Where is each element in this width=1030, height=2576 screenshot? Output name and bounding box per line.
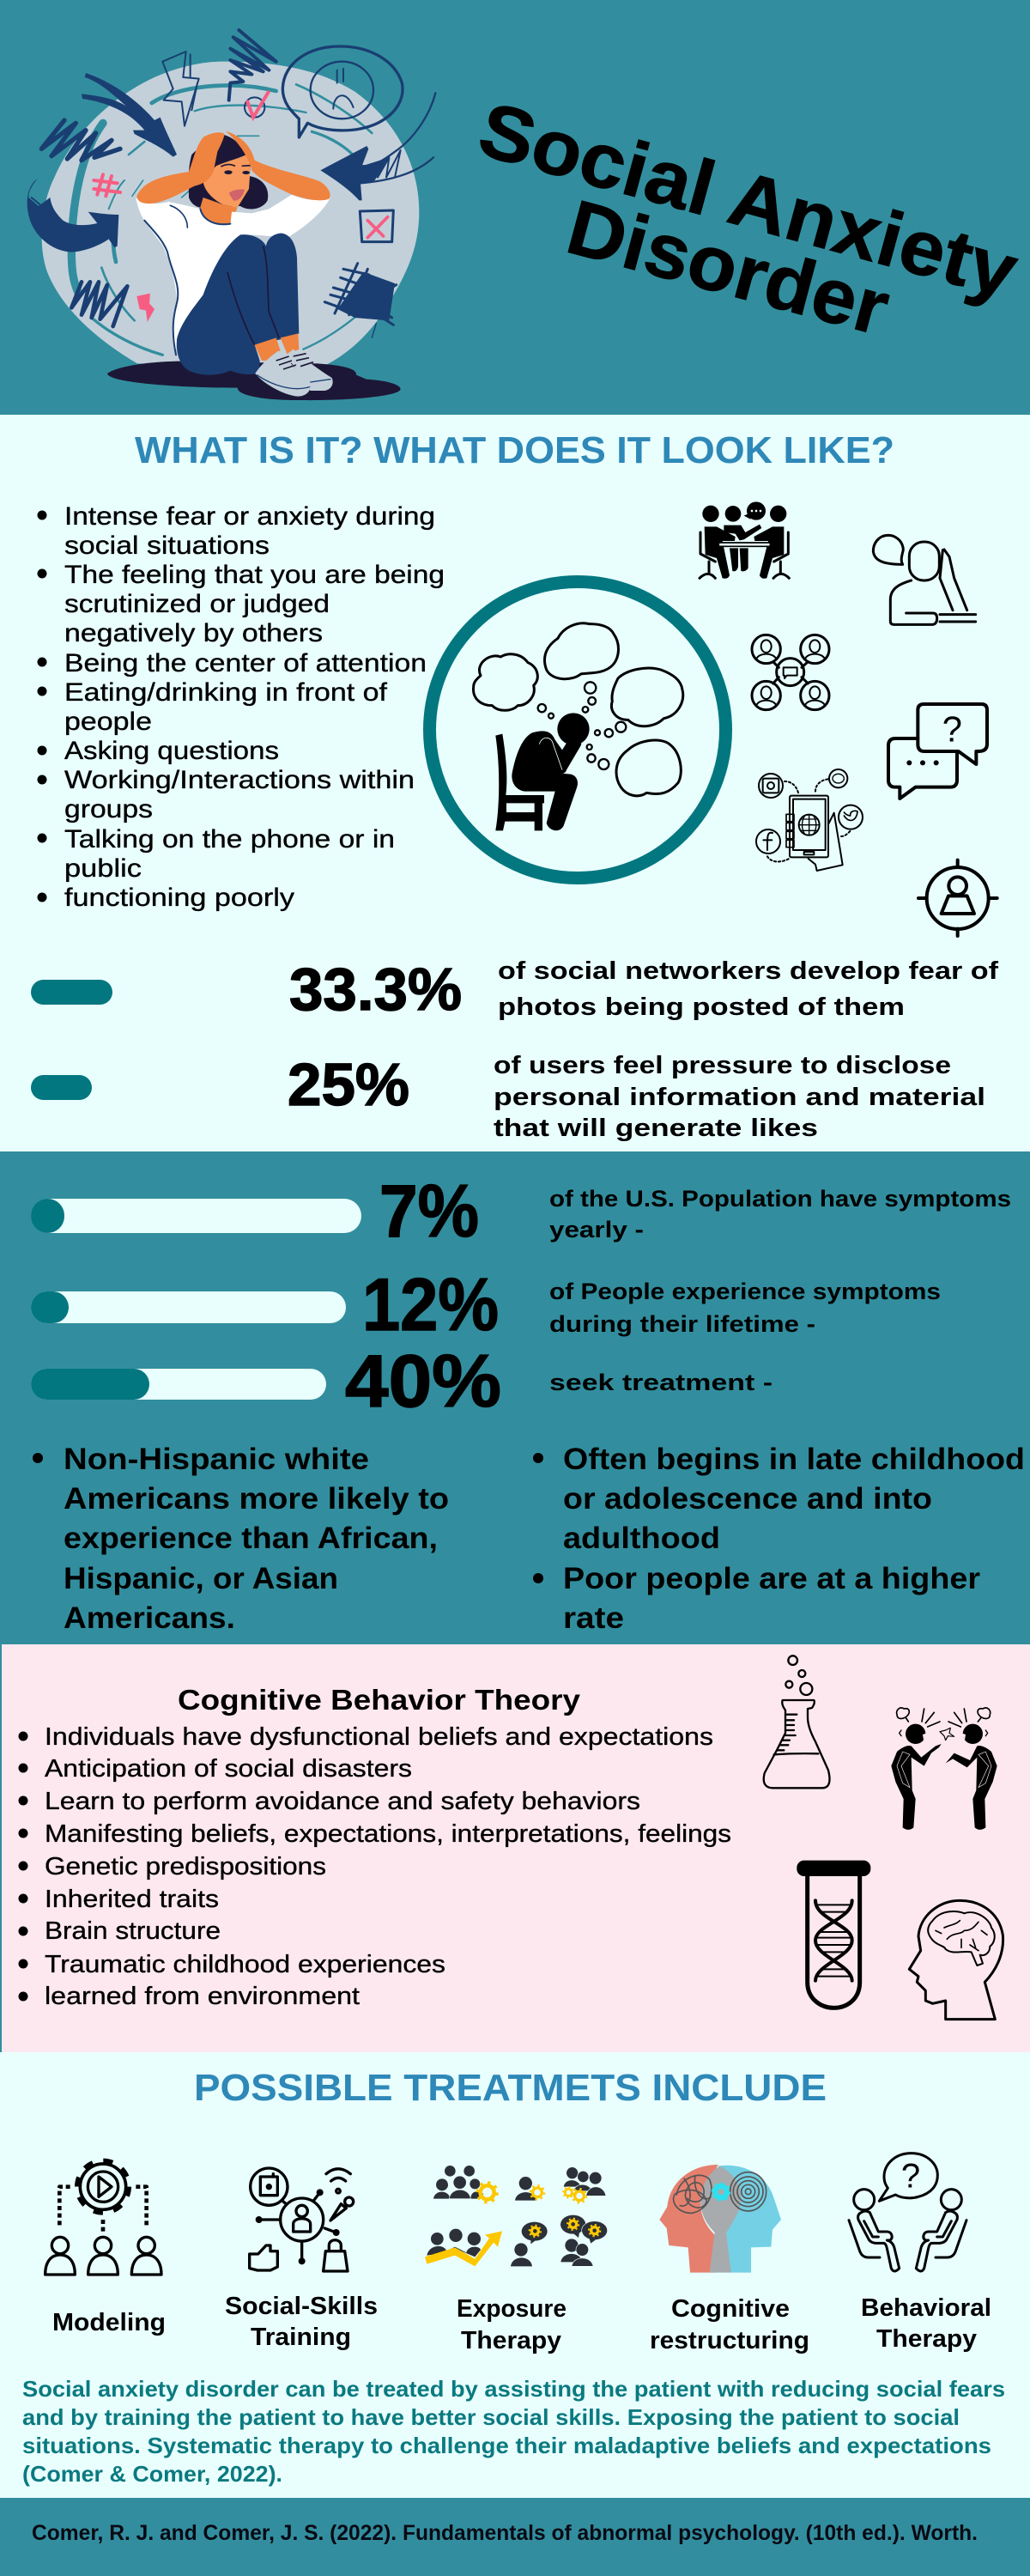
treatment labels: restructuring [650, 2327, 809, 2354]
icon: behavioral therapy [849, 2154, 966, 2271]
stat: 7%: of the U.S. Population have symptoms [549, 1186, 1011, 1212]
demographics bullet: left: Hispanic, or Asian [64, 1562, 338, 1595]
demographics bullets: right: or adolescence and into [563, 1482, 932, 1516]
symptom bullet list: Being the center of attention [64, 649, 427, 677]
illustration: anxious woman [27, 30, 435, 400]
treatment labels: Exposure [457, 2295, 566, 2323]
theory bullet list: Learn to perform avoidance and safety behaviors [45, 1788, 640, 1815]
theory bullet list: Manifesting beliefs, expectations, interpretations, feelings [45, 1820, 731, 1848]
treatment description paragraph: Social anxiety disorder can be treated by assisting the patient with reducing social fears [22, 2376, 1005, 2402]
icon: chat bubbles with question mark: ? [942, 708, 962, 749]
title: Disorder [559, 185, 898, 352]
stat: 33.3% [31, 956, 998, 1023]
demographics bullets: right [533, 1443, 1025, 1635]
treatment labels: Modeling [52, 2309, 166, 2336]
symptom bullet list: public [64, 854, 142, 883]
symptom bullet list: negatively by others [64, 619, 323, 647]
hair [189, 135, 268, 209]
stat: 25%: of users feel pressure to disclose [494, 1052, 951, 1079]
navy arrows [27, 73, 389, 252]
stat: 7%: yearly - [549, 1217, 644, 1242]
icon: exposure therapy [425, 2166, 608, 2266]
treatment labels: Social-Skills [225, 2293, 378, 2320]
icon: social skills training [250, 2168, 354, 2271]
treatment labels [52, 2293, 991, 2354]
stat: 25% [31, 1051, 985, 1142]
demographics bullets: right: Often begins in late childhood [563, 1443, 1025, 1476]
symptom bullet list: functioning poorly [64, 884, 294, 912]
demographics bullets: right: Poor people are at a higher [563, 1562, 980, 1595]
theory bullet list: Anticipation of social disasters [45, 1755, 412, 1783]
legs [177, 234, 299, 375]
title: Social Anxiety [470, 87, 1026, 315]
demographics bullets: right: rate [563, 1601, 624, 1635]
icon: people at table [700, 501, 789, 579]
heading: treatments: POSSIBLE TREATMETS INCLUDE [194, 2067, 827, 2109]
symptom bullet list: people [64, 708, 152, 736]
heading: cognitive behavior theory: Cognitive Behavior Theory [178, 1684, 581, 1716]
treatment labels: Behavioral [861, 2294, 991, 2322]
theory bullet list: Traumatic childhood experiences [45, 1951, 445, 1978]
icon: chat bubbles with question mark [888, 704, 987, 799]
icon: arguing figures [891, 1708, 997, 1830]
symptom bullet list: groups [64, 795, 153, 823]
scribbles [229, 30, 276, 100]
neck and face [200, 197, 238, 225]
shoes [286, 349, 333, 391]
stat: 12%: 12% [362, 1264, 499, 1346]
reference citation: Comer, R. J. and Comer, J. S. (2022). Fundamentals of abnormal psychology. (10th ed.). Worth. [32, 2521, 978, 2545]
stat: 12%: during their lifetime - [549, 1311, 815, 1337]
icon: cognitive restructuring heads [659, 2165, 781, 2273]
stat: 7% [31, 1170, 1011, 1253]
shirt [136, 195, 330, 355]
symptom bullet list: Intense fear or anxiety during [64, 502, 435, 531]
stat: 7%: 7% [379, 1170, 479, 1253]
theory bullet list: Genetic predispositions [45, 1853, 326, 1880]
treatment labels: Therapy [876, 2325, 977, 2353]
theory bullet list [19, 1723, 731, 2010]
shadow [107, 361, 401, 400]
icon: modeling [45, 2160, 161, 2275]
stat: 33.3%: of social networkers develop fear of [498, 957, 998, 985]
stat: 12%: of People experience symptoms [549, 1279, 941, 1304]
stat: 25%: that will generate likes [494, 1115, 818, 1142]
treatment description paragraph: (Comer & Comer, 2022). [22, 2461, 282, 2487]
icon: DNA test tube [797, 1861, 870, 2008]
symptom bullet list: social situations [64, 532, 270, 560]
stat: 25%: 25% [288, 1051, 409, 1118]
symptom bullet list: Eating/drinking in front of [64, 678, 388, 707]
symptom bullet list: Working/Interactions within [64, 766, 415, 794]
treatment labels: Training [251, 2324, 351, 2351]
icon: person with speech bubble [873, 535, 976, 624]
theory bullet list: Individuals have dysfunctional beliefs and expectations [45, 1723, 713, 1751]
treatment description paragraph [22, 2376, 1005, 2487]
theory bullet list: Brain structure [45, 1917, 221, 1945]
demographics bullet: left: Non-Hispanic white [64, 1443, 369, 1476]
icon: flask [764, 1656, 829, 1788]
symptom bullet list: The feeling that you are being [64, 561, 445, 589]
demographics bullet: left: experience than African, [64, 1522, 438, 1555]
symptom bullet list: Asking questions [64, 737, 279, 765]
stat: 40%: 40% [345, 1340, 501, 1423]
treatment labels: Cognitive [671, 2295, 790, 2323]
icon: target person [918, 860, 997, 936]
treatment description paragraph: situations. Systematic therapy to challenge their maladaptive beliefs and expectations [22, 2433, 991, 2458]
icon: head with brain [909, 1900, 1003, 2020]
symptom bullet list: Talking on the phone or in [64, 825, 395, 854]
stat: 25%: personal information and material [494, 1084, 985, 1111]
icon: behavioral therapy: ? [901, 2158, 920, 2196]
stat: 33.3%: 33.3% [289, 956, 462, 1023]
demographics bullets: right: adulthood [563, 1522, 720, 1555]
stat: 33.3%: photos being posted of them [498, 993, 905, 1021]
demographics bullet: left [33, 1443, 449, 1635]
icon: phone and social media [756, 769, 863, 871]
pink marks [94, 92, 388, 238]
symptom bullet list [38, 502, 445, 912]
treatment description paragraph: and by training the patient to have better social skills. Exposing the patient to social [22, 2404, 960, 2430]
icon: worried person with thought clouds in circle [429, 582, 726, 878]
theory bullet list: learned from environment [45, 1983, 360, 2010]
arms [136, 132, 225, 204]
icon: social network nodes [752, 635, 829, 710]
stat: 40% [31, 1340, 772, 1423]
symptom bullet list: scrutinized or judged [64, 590, 330, 618]
theory bullet list: Inherited traits [45, 1886, 219, 1913]
heading: what is it: WHAT IS IT? WHAT DOES IT LOOK LIKE? [135, 429, 894, 471]
demographics bullet: left: Americans more likely to [64, 1482, 449, 1516]
stat: 40%: seek treatment - [549, 1370, 772, 1395]
demographics bullet: left: Americans. [64, 1601, 235, 1635]
treatment labels: Therapy [461, 2327, 561, 2354]
stat: 12% [31, 1264, 941, 1346]
